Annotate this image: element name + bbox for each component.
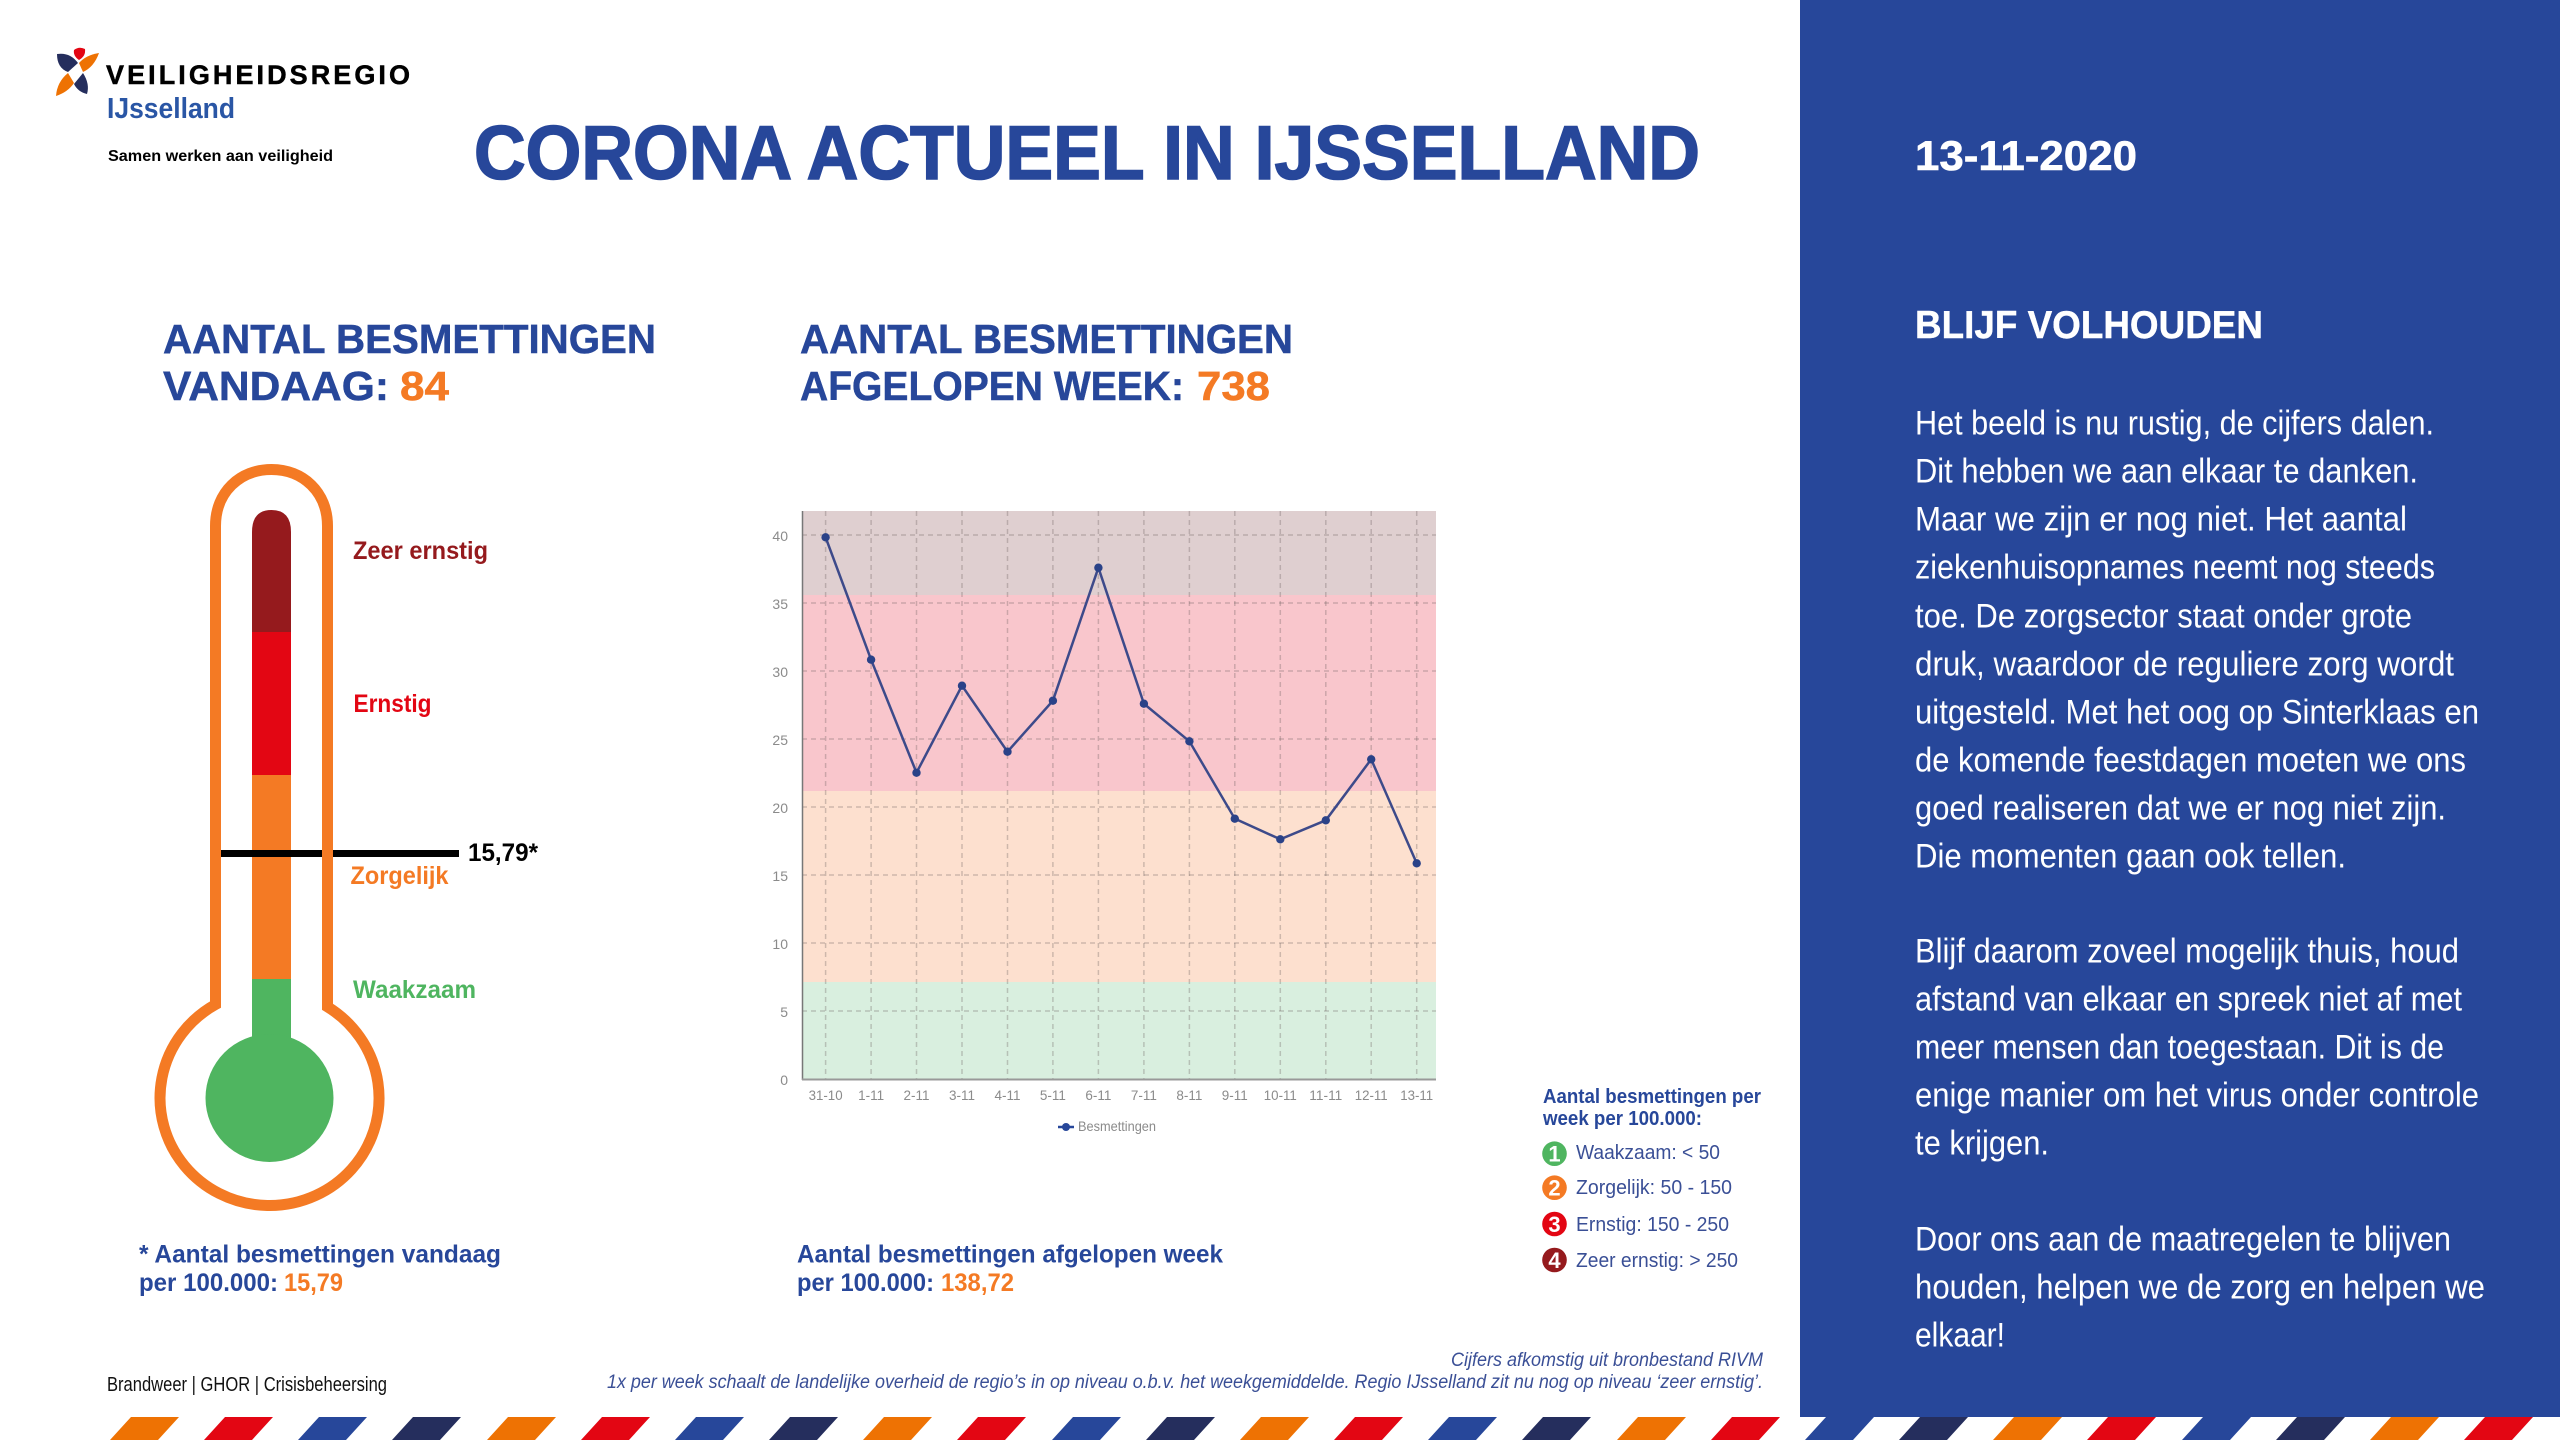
chart background bands (802, 511, 1436, 1079)
chart legend: Besmettingen (1078, 1118, 1156, 1134)
thermometer fill levels (206, 510, 334, 1162)
legend item 3 (1542, 1212, 1729, 1237)
text block: paragraph 1 (1915, 404, 2479, 876)
text block: paragraph 2: te krijgen. (1915, 1124, 2049, 1162)
heading: infections today: VANDAAG: (163, 363, 389, 409)
footer: source note: Cijfers afkomstig uit bronbestand RIVM (1451, 1350, 1763, 1371)
current value label: 15,79* (468, 839, 538, 867)
heading: infections past week: AANTAL BESMETTINGEN (800, 316, 1293, 362)
legend item 2: 2 (1548, 1176, 1561, 1200)
legend heading (1542, 1086, 1761, 1130)
x axis labels: 2-11 (904, 1087, 930, 1103)
caption: today per 100.000: per 100.000: (139, 1269, 278, 1297)
legend item 3: Ernstig: 150 - 250 (1576, 1214, 1729, 1236)
legend item 4 (1542, 1248, 1738, 1273)
heading: infections past week: AFGELOPEN WEEK: (800, 363, 1184, 409)
line chart: infections per day (772, 511, 1436, 1134)
sidebar heading: BLIJF VOLHOUDEN (1915, 304, 2263, 347)
text block: paragraph 1: toe. De zorgsector staat onder grote (1915, 598, 2412, 636)
text block: paragraph 1: de komende feestdagen moeten we ons (1915, 742, 2466, 780)
icon: logo figure (56, 48, 99, 96)
legend: severity levels (1542, 1086, 1761, 1273)
text block: paragraph 3 (1915, 1220, 2485, 1354)
heading: infections today (163, 316, 656, 409)
x axis labels: 11-11 (1309, 1087, 1343, 1103)
legend heading: Aantal besmettingen per (1543, 1086, 1761, 1108)
level label: zorgelijk: Zorgelijk (350, 862, 449, 890)
x axis labels: 12-11 (1355, 1087, 1388, 1103)
text block: paragraph 2: Blijf daarom zoveel mogelijk thuis, houd (1915, 932, 2459, 970)
x axis labels: 6-11 (1085, 1087, 1112, 1103)
footer: source note: 1x per week schaalt de landelijke overheid de regio’s in op niveau o.b.v. het weekgemiddelde. Regio IJsselland zit nu nog op niveau ‘zeer ernstig’. (607, 1372, 1763, 1393)
caption: past week per 100.000: Aantal besmettingen afgelopen week (797, 1240, 1223, 1268)
text block: paragraph 2: afstand van elkaar en spreek niet af met (1915, 980, 2462, 1018)
footer: source note (607, 1350, 1763, 1393)
y axis labels: 25 (772, 732, 788, 748)
striped bottom border (110, 1417, 2533, 1440)
x axis labels (809, 1087, 1433, 1103)
text block: paragraph 3: Door ons aan de maatregelen te blijven (1915, 1220, 2451, 1258)
x axis labels: 5-11 (1040, 1087, 1066, 1103)
thermometer outline (160, 470, 379, 1206)
x axis labels: 31-10 (809, 1087, 843, 1103)
text block: paragraph 1: Dit hebben we aan elkaar te danken. (1915, 452, 2418, 490)
date: 13-11-2020 (1915, 132, 2137, 179)
text block: paragraph 3: elkaar! (1915, 1316, 2005, 1354)
x axis labels: 13-11 (1400, 1087, 1433, 1103)
y axis labels: 0 (780, 1072, 788, 1088)
y axis labels: 5 (780, 1004, 788, 1020)
y axis labels: 20 (772, 800, 788, 816)
text block: paragraph 1: druk, waardoor de reguliere zorg wordt (1915, 646, 2455, 684)
y axis labels (772, 528, 788, 1088)
legend item 3: 3 (1548, 1212, 1561, 1237)
logo wordmark: VEILIGHEIDSREGIO (106, 60, 410, 90)
heading: infections past week: 738 (1197, 363, 1270, 409)
text block: paragraph 1: uitgesteld. Met het oog op Sinterklaas en (1915, 694, 2479, 732)
thermometer chart (160, 470, 538, 1206)
x axis labels: 9-11 (1222, 1087, 1248, 1103)
legend heading: week per 100.000: (1542, 1108, 1702, 1130)
y axis labels: 30 (772, 664, 788, 680)
text block: paragraph 1: Maar we zijn er nog niet. Het aantal (1915, 500, 2407, 538)
logo: Veiligheidsregio IJsselland (56, 48, 410, 165)
legend item 4: Zeer ernstig: > 250 (1576, 1250, 1738, 1272)
data points (821, 533, 1421, 868)
title: CORONA ACTUEEL IN IJSSELLAND (474, 111, 1700, 196)
legend item 2: Zorgelijk: 50 - 150 (1576, 1177, 1732, 1199)
text block: paragraph 1: Het beeld is nu rustig, de cijfers dalen. (1915, 404, 2434, 442)
caption: past week per 100.000 (797, 1240, 1223, 1297)
x axis labels: 8-11 (1176, 1087, 1203, 1103)
legend item 1 (1542, 1141, 1720, 1166)
caption: today per 100.000: * Aantal besmettingen vandaag (139, 1240, 501, 1268)
legend item 4: 4 (1548, 1248, 1561, 1273)
text block: paragraph 1: ziekenhuisopnames neemt nog steeds (1915, 548, 2435, 586)
footer: organisations: Brandweer | GHOR | Crisisbeheersing (107, 1374, 387, 1396)
caption: past week per 100.000: per 100.000: (797, 1269, 934, 1297)
y axis labels: 35 (772, 596, 788, 612)
legend item 1: Waakzaam: < 50 (1576, 1142, 1720, 1164)
text block: paragraph 1: goed realiseren dat we er nog niet zijn. (1915, 790, 2446, 828)
text block: paragraph 1: Die momenten gaan ook tellen. (1915, 838, 2346, 876)
text block: paragraph 2 (1915, 932, 2479, 1162)
text block: paragraph 2: meer mensen dan toegestaan. Dit is de (1915, 1028, 2444, 1066)
x axis labels: 3-11 (949, 1087, 975, 1103)
level label: waakzaam: Waakzaam (353, 976, 476, 1004)
y axis labels: 15 (772, 868, 788, 884)
caption: today per 100.000: 15,79 (284, 1269, 343, 1297)
level label: zeer ernstig: Zeer ernstig (353, 537, 488, 565)
text block: paragraph 3: houden, helpen we de zorg en helpen we (1915, 1268, 2485, 1306)
y axis labels: 40 (772, 528, 788, 544)
x axis labels: 1-11 (858, 1087, 884, 1103)
x axis labels: 7-11 (1131, 1087, 1157, 1103)
current value marker line (220, 850, 459, 857)
data line (826, 537, 1417, 863)
x axis labels: 4-11 (994, 1087, 1021, 1103)
legend item 1: 1 (1548, 1142, 1561, 1166)
caption: past week per 100.000: 138,72 (941, 1269, 1014, 1297)
logo region name: IJsselland (107, 93, 235, 125)
heading: infections past week (800, 316, 1293, 409)
panel: right blue sidebar (1800, 0, 2560, 1417)
caption: today per 100.000 (139, 1240, 501, 1297)
heading: infections today: AANTAL BESMETTINGEN (163, 316, 656, 362)
heading: infections today: 84 (400, 363, 449, 409)
level label: ernstig: Ernstig (354, 690, 432, 718)
x axis labels: 10-11 (1264, 1087, 1297, 1103)
y axis labels: 10 (772, 936, 788, 952)
logo tagline: Samen werken aan veiligheid (108, 148, 333, 165)
text block: paragraph 2: enige manier om het virus onder controle (1915, 1076, 2479, 1114)
